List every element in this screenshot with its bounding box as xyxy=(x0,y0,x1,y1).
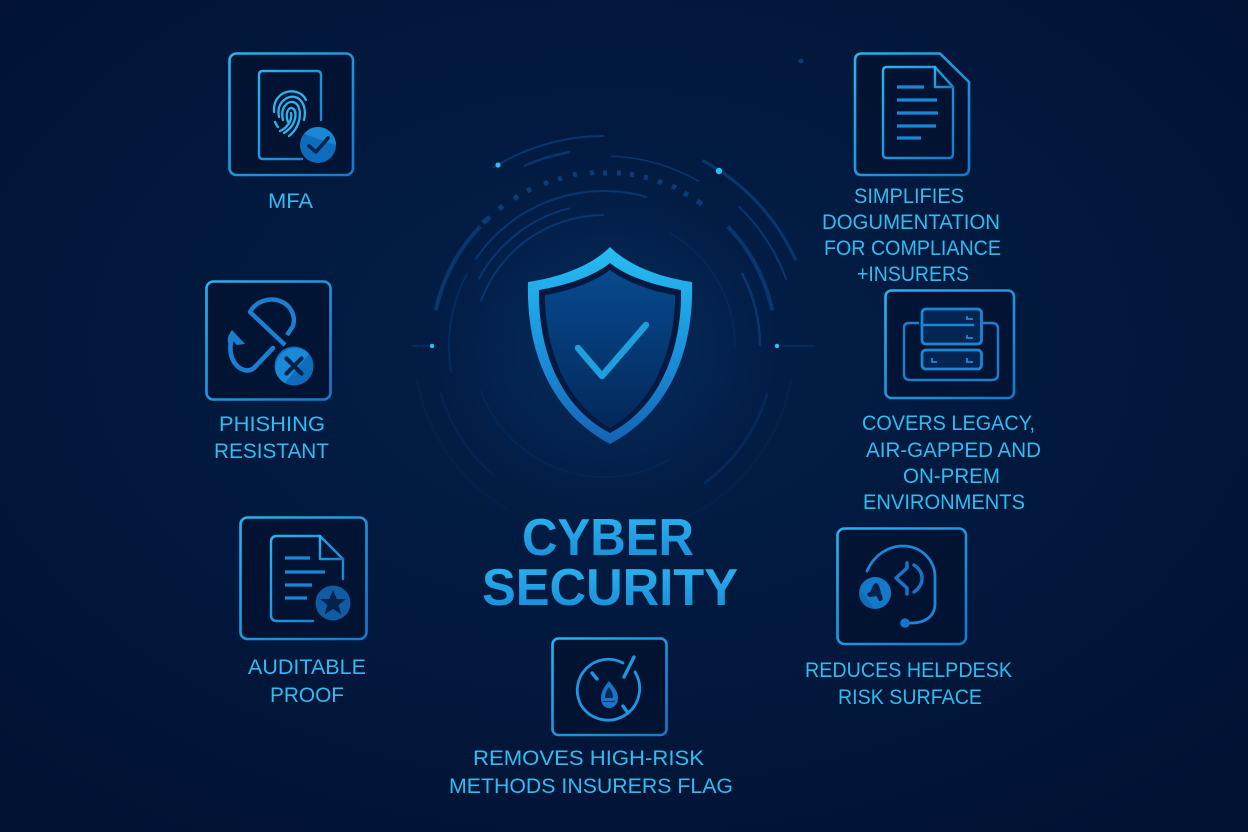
icon: server stack xyxy=(904,309,998,380)
legacy icon frame xyxy=(886,290,1014,398)
panel: phishing resistant xyxy=(206,282,330,463)
icon: document xyxy=(883,67,953,158)
panel: removes high-risk methods xyxy=(449,638,733,798)
MFA icon frame xyxy=(230,54,353,175)
documentation icon frame xyxy=(855,54,969,175)
helpdesk icon frame xyxy=(838,528,966,644)
panel: reduces helpdesk risk xyxy=(805,528,1012,709)
panel: removes high-risk methods: METHODS INSURERS FLAG xyxy=(449,775,733,798)
panel: simplifies documentation: +INSURERS xyxy=(857,263,969,286)
phishing icon frame xyxy=(206,282,330,400)
MFA label: MFA xyxy=(268,190,313,213)
panel: covers legacy environments: ENVIRONMENTS xyxy=(863,491,1025,514)
panel: MFA xyxy=(230,54,353,213)
panel: simplifies documentation xyxy=(822,54,1001,286)
icon: fingerprint document with check xyxy=(259,71,336,163)
panel: covers legacy environments: AIR-GAPPED AND xyxy=(866,439,1041,462)
removes label: REMOVES HIGH-RISK xyxy=(473,747,704,770)
icon: blocked flame gauge xyxy=(577,657,640,720)
panel: auditable proof xyxy=(240,518,366,707)
auditable label: AUDITABLE xyxy=(248,656,366,679)
phishing label: PHISHING xyxy=(219,413,325,436)
helpdesk label: REDUCES HELPDESK xyxy=(805,659,1012,682)
panel: covers legacy environments: ON-PREM xyxy=(903,465,1000,488)
central rings and nodes xyxy=(394,58,815,556)
icon: fish hook with cross xyxy=(228,299,314,386)
title xyxy=(482,509,738,617)
panel: covers legacy environments xyxy=(862,290,1041,514)
central shield icon xyxy=(528,247,692,444)
title: CYBER xyxy=(522,509,694,567)
removes icon frame xyxy=(552,638,666,735)
panel: simplifies documentation: FOR COMPLIANCE xyxy=(824,237,1001,260)
panel: phishing resistant: RESISTANT xyxy=(214,440,329,463)
title: SECURITY xyxy=(482,559,738,617)
panel: simplifies documentation: DOGUMENTATION xyxy=(822,211,1000,234)
auditable icon frame xyxy=(240,518,366,639)
panel: reduces helpdesk risk: RISK SURFACE xyxy=(838,686,982,709)
icon: document with star badge xyxy=(271,536,350,621)
documentation label: SIMPLIFIES xyxy=(854,185,964,208)
panel: auditable proof: PROOF xyxy=(270,684,344,707)
legacy label: COVERS LEGACY, xyxy=(862,412,1035,435)
icon: headset xyxy=(859,546,935,628)
